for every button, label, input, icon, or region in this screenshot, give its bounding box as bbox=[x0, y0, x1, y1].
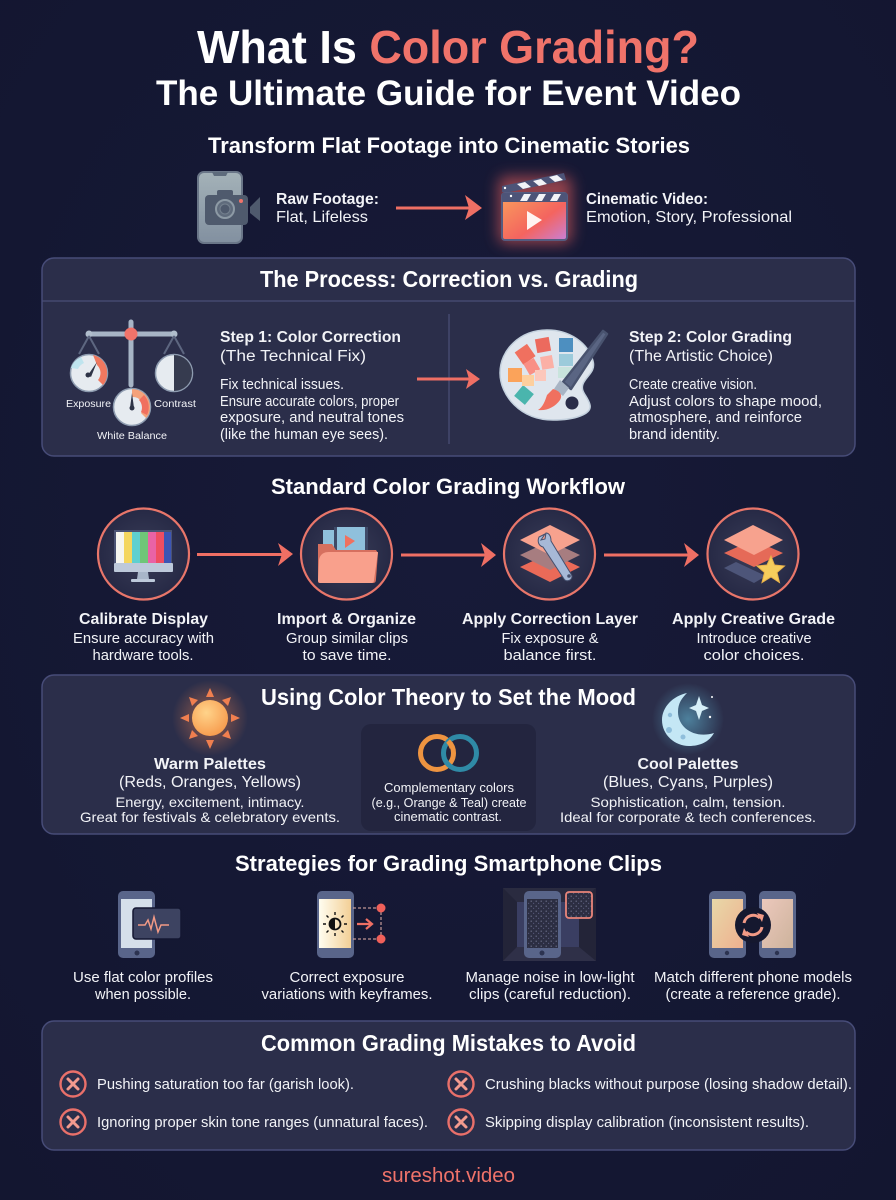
cool palettes text: Ideal for corporate & tech conferences. bbox=[560, 809, 816, 825]
icon: scales with gauges: Exposure bbox=[66, 399, 111, 410]
description: calibrate display bbox=[73, 631, 214, 664]
caption: match phones: Match different phone models bbox=[654, 970, 852, 986]
panel: process bbox=[42, 258, 855, 456]
mistake: calibration: Skipping display calibration (inconsistent results). bbox=[485, 1114, 809, 1131]
description: correction bbox=[502, 631, 599, 664]
caption: flat profiles bbox=[73, 970, 213, 1003]
step 2 text: Adjust colors to shape mood, bbox=[629, 393, 822, 410]
description: correction: Fix exposure & bbox=[502, 631, 599, 647]
label: import and organize: Import & Organize bbox=[277, 611, 416, 628]
title bbox=[156, 21, 741, 113]
step 1 text: Ensure accurate colors, proper bbox=[220, 393, 399, 410]
panel: mistakes bbox=[42, 1021, 855, 1150]
title: The Ultimate Guide for Event Video bbox=[156, 74, 741, 113]
cool palettes text bbox=[560, 756, 816, 825]
callout: complementary colors bbox=[361, 724, 536, 831]
caption: keyframes: Correct exposure bbox=[290, 970, 404, 986]
cool palettes text: Sophistication, calm, tension. bbox=[590, 794, 786, 810]
description: import bbox=[286, 631, 408, 664]
icon: clapperboard bbox=[498, 173, 572, 244]
description: creative grade: color choices. bbox=[704, 648, 804, 664]
cinematic video text: Emotion, Story, Professional bbox=[586, 209, 792, 226]
description: import: Group similar clips bbox=[286, 631, 408, 647]
heading: process: The Process: Correction vs. Grading bbox=[260, 266, 638, 292]
icon: two phones with sync bbox=[709, 891, 796, 958]
arrow: step 1 to 2 bbox=[197, 543, 293, 566]
warm palettes text: (Reds, Oranges, Yellows) bbox=[119, 774, 301, 791]
heading: workflow: Standard Color Grading Workflow bbox=[271, 474, 626, 499]
caption: noise: clips (careful reduction). bbox=[469, 987, 631, 1003]
icon: interlocked rings bbox=[420, 736, 476, 770]
description: import: to save time. bbox=[302, 648, 392, 664]
workflow step 4 bbox=[672, 508, 835, 664]
mistake: calibration bbox=[448, 1110, 809, 1134]
caption: keyframes bbox=[262, 970, 432, 1003]
mistake: crushing blacks: Crushing blacks without purpose (losing shadow detail). bbox=[485, 1076, 852, 1093]
caption: match phones: (create a reference grade). bbox=[666, 987, 840, 1003]
icon: phone with exposure keyframes bbox=[317, 891, 386, 958]
mistake: saturation bbox=[60, 1072, 354, 1096]
caption: flat profiles: when possible. bbox=[94, 987, 191, 1003]
panel: color theory bbox=[42, 675, 855, 834]
label: apply correction layer: Apply Correction Layer bbox=[462, 611, 638, 628]
strategy 1: flat profiles bbox=[73, 891, 213, 1003]
cinematic video text bbox=[586, 191, 792, 226]
caption: noise: Manage noise in low-light bbox=[466, 970, 634, 986]
description: correction: balance first. bbox=[504, 648, 596, 664]
warm palettes text: Energy, excitement, intimacy. bbox=[116, 794, 304, 810]
caption: noise bbox=[466, 970, 634, 1003]
mistake: crushing blacks bbox=[448, 1072, 852, 1096]
icon: palette and brush bbox=[500, 330, 607, 420]
step 2 text bbox=[629, 329, 822, 443]
title: What Is Color Grading? bbox=[197, 21, 699, 73]
step 2 text: atmosphere, and reinforce bbox=[629, 409, 802, 426]
callout: complementary colors: cinematic contrast. bbox=[394, 809, 502, 824]
raw footage text: Raw Footage: bbox=[276, 191, 379, 208]
step 1 text: Step 1: Color Correction bbox=[220, 329, 401, 346]
heading: mistakes: Common Grading Mistakes to Avoid bbox=[261, 1030, 636, 1056]
cool palettes text: Cool Palettes bbox=[638, 756, 738, 773]
label: apply creative grade: Apply Creative Grade bbox=[672, 611, 835, 628]
warm palettes text: Great for festivals & celebratory events. bbox=[80, 809, 340, 825]
icon: folder with film bbox=[301, 508, 392, 600]
arrow: step 3 to 4 bbox=[604, 543, 699, 567]
arrow: correction to grading bbox=[417, 369, 480, 389]
strategy 2: keyframes bbox=[262, 891, 432, 1003]
heading: color theory: Using Color Theory to Set the Mood bbox=[261, 684, 636, 710]
step 1 text: (like the human eye sees). bbox=[220, 426, 388, 443]
caption: flat profiles: Use flat color profiles bbox=[73, 970, 213, 986]
arrow: step 2 to 3 bbox=[401, 543, 496, 567]
description: calibrate display: hardware tools. bbox=[92, 648, 194, 664]
callout: complementary colors: Complementary colors bbox=[384, 780, 514, 795]
step 1 text: Fix technical issues. bbox=[220, 376, 344, 393]
warm palettes text: Warm Palettes bbox=[154, 756, 266, 773]
icon: phone with waveform bbox=[118, 891, 181, 958]
icon: moon bbox=[652, 683, 724, 755]
icon: scales with gauges: Contrast bbox=[154, 399, 196, 410]
caption: keyframes: variations with keyframes. bbox=[262, 987, 432, 1003]
icon: sun bbox=[172, 680, 248, 756]
icon: scales with gauges: White Balance bbox=[97, 431, 167, 442]
icon: scales with gauges bbox=[66, 322, 196, 442]
mistake: skin tones: Ignoring proper skin tone ranges (unnatural faces). bbox=[97, 1114, 428, 1131]
step 2 text: Create creative vision. bbox=[629, 376, 757, 393]
label: calibrate display: Calibrate Display bbox=[79, 611, 208, 628]
step 1 text: exposure, and neutral tones bbox=[220, 409, 404, 426]
raw footage text bbox=[276, 191, 379, 226]
step 1 text bbox=[220, 329, 404, 443]
description: creative grade bbox=[696, 631, 812, 664]
step 2 text: (The Artistic Choice) bbox=[629, 348, 773, 365]
strategy 3: noise bbox=[466, 888, 634, 1003]
strategy 4: match phones bbox=[654, 891, 852, 1003]
arrow: raw to cinematic bbox=[396, 195, 482, 220]
description: creative grade: Introduce creative bbox=[696, 631, 812, 647]
workflow step 2 bbox=[277, 508, 416, 664]
footer: website: sureshot.video bbox=[382, 1165, 515, 1187]
raw footage text: Flat, Lifeless bbox=[276, 209, 368, 226]
icon: layers with wrench bbox=[504, 508, 595, 600]
callout: complementary colors: (e.g., Orange & Teal) create bbox=[372, 795, 526, 810]
warm palettes text bbox=[80, 756, 340, 825]
workflow step 1 bbox=[73, 508, 214, 664]
mistake: saturation: Pushing saturation too far (garish look). bbox=[97, 1076, 354, 1093]
step 1 text: (The Technical Fix) bbox=[220, 348, 366, 365]
heading: strategies: Strategies for Grading Smartphone Clips bbox=[235, 851, 662, 876]
step 2 text: brand identity. bbox=[629, 426, 720, 443]
workflow step 3 bbox=[462, 508, 638, 664]
icon: phone in low light with noise swatch bbox=[503, 888, 596, 961]
icon: calibrate display bbox=[98, 508, 189, 600]
cool palettes text: (Blues, Cyans, Purples) bbox=[603, 774, 773, 791]
description: calibrate display: Ensure accuracy with bbox=[73, 631, 214, 647]
mistake: skin tones bbox=[60, 1110, 428, 1134]
icon: layers with star bbox=[708, 508, 798, 600]
cinematic video text: Cinematic Video: bbox=[586, 191, 708, 208]
caption: match phones bbox=[654, 970, 852, 1003]
step 2 text: Step 2: Color Grading bbox=[629, 329, 792, 346]
heading: transform: Transform Flat Footage into Cinematic Stories bbox=[208, 133, 690, 158]
icon: phone camera bbox=[198, 172, 260, 243]
